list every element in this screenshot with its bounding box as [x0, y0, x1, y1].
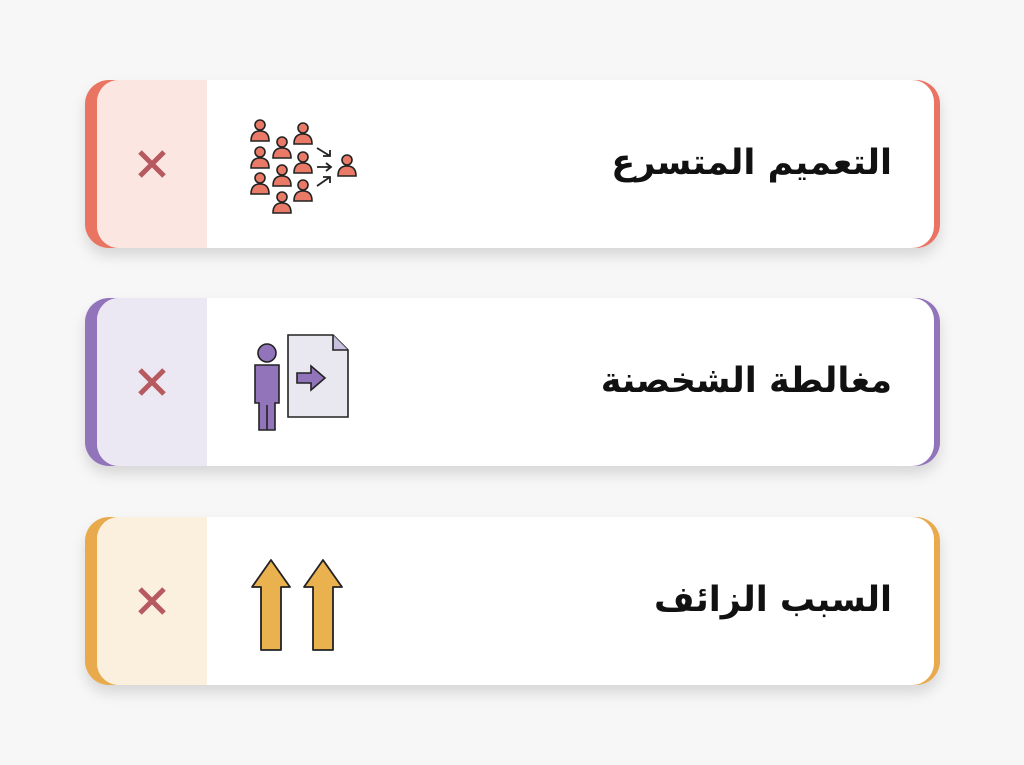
card: ad hominem: [85, 298, 940, 466]
icon: cross: [138, 368, 166, 396]
card: hasty generalization: [85, 80, 940, 248]
heading: السبب الزائف: [654, 580, 892, 620]
icon: crowd to one: [250, 119, 357, 214]
card: false cause: [85, 517, 940, 685]
icon: cross: [138, 150, 166, 178]
panel: orange tint with X: [97, 517, 207, 685]
heading: التعميم المتسرع: [611, 143, 892, 183]
panel: purple tint with X: [97, 298, 207, 466]
heading: مغالطة الشخصنة: [601, 361, 892, 401]
icon: person and document: [254, 334, 349, 431]
icon: cross: [138, 587, 166, 615]
panel: red tint with X: [97, 80, 207, 248]
icon: two up arrows: [251, 559, 343, 651]
